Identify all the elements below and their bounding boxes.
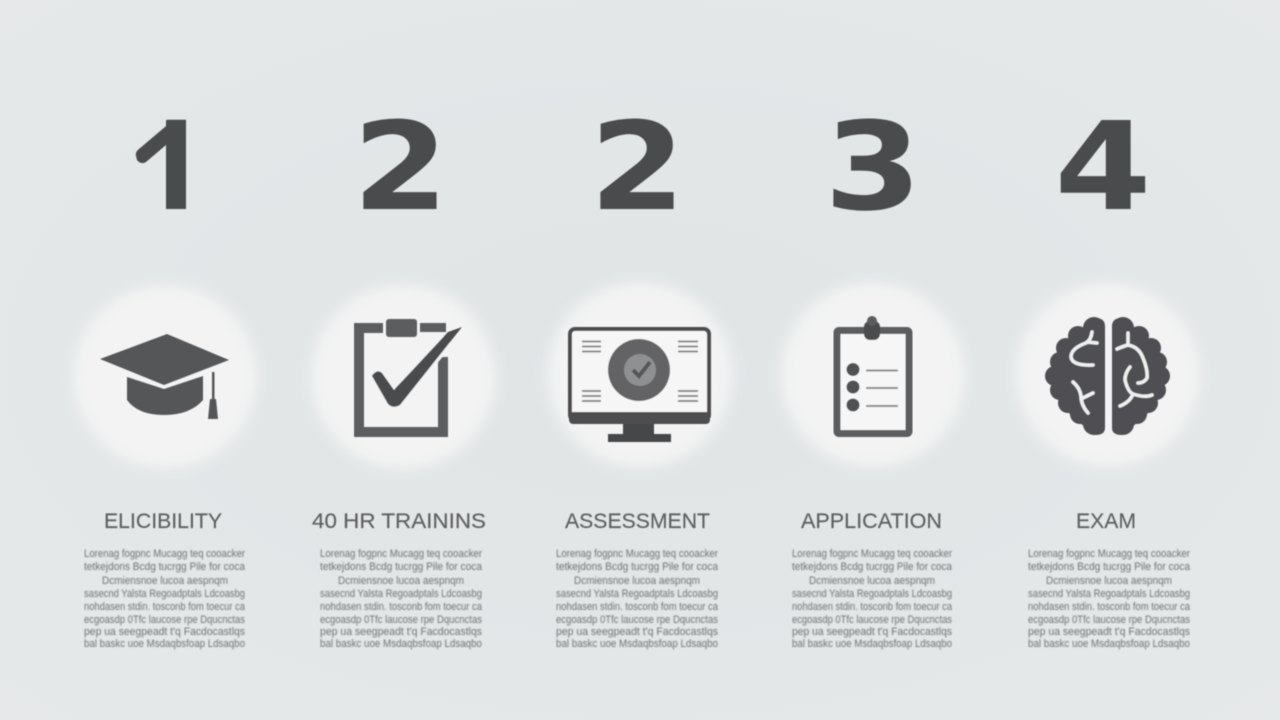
heading: application: APPLICATION <box>801 510 942 533</box>
text block: eligibility description: sasecnd Yalsta Regoadptals Ldcoasbg <box>84 588 245 600</box>
text block: exam description: Dcmiensnoe lucoa aespnqm <box>1046 575 1172 587</box>
text block: eligibility description: Lorenag fogpnc Mucagg teq cooacker <box>84 548 245 560</box>
icon circle <box>295 269 511 485</box>
text block: application description <box>792 548 953 650</box>
icon: monitor with badge <box>569 329 710 442</box>
text block: eligibility description: Dcmiensnoe lucoa aespnqm <box>102 575 228 587</box>
icon: clipboard list <box>837 316 909 434</box>
text block: eligibility description: bal baskc uoe Msdaqbsfoap Ldsaqbo <box>84 638 245 650</box>
icon circle <box>532 267 748 483</box>
text block: application description: pep ua seegpeadt t'q Facdocastlqs <box>792 626 952 638</box>
text block: exam description: ecgoasdp 0Tfc laucose rpe Dqucnctas <box>1028 614 1190 626</box>
text block: assessment description: Dcmiensnoe lucoa aespnqm <box>574 575 700 587</box>
step numbers <box>135 118 1146 212</box>
text block: training description: nohdasen stdin. tosconb fom toecur ca <box>320 601 483 613</box>
text block: application description: sasecnd Yalsta Regoadptals Ldcoasbg <box>792 588 952 600</box>
text block: exam description: nohdasen stdin. tosconb fom toecur ca <box>1028 601 1191 613</box>
text block: training description: bal baskc uoe Msdaqbsfoap Ldsaqbo <box>320 638 482 650</box>
text block: training description <box>320 548 483 650</box>
icon circle <box>765 267 981 483</box>
panel: training icon <box>295 269 511 485</box>
text block: eligibility description <box>84 548 246 650</box>
icon: checklist clipboard <box>359 319 462 432</box>
icon: graduation cap <box>100 334 229 419</box>
number 2: 2 <box>352 96 448 238</box>
panel: eligibility icon <box>57 269 273 485</box>
text block: exam description <box>1028 548 1191 650</box>
text block: assessment description: tetkejdons Bcdg tucrgg Pile for coca <box>556 561 719 573</box>
number 2 second: 2 <box>590 96 686 238</box>
number 1 <box>135 119 187 210</box>
text block: application description: Dcmiensnoe lucoa aespnqm <box>809 575 935 587</box>
heading: exam: EXAM <box>1076 510 1136 533</box>
text block: exam description: pep ua seegpeadt t'q Facdocastlqs <box>1028 626 1190 638</box>
panel: exam text <box>1028 510 1191 650</box>
panel: exam icon <box>1000 267 1216 483</box>
panel: eligibility text <box>84 510 246 650</box>
heading: 40 hr training: 40 HR TRAININS <box>312 510 486 533</box>
text block: application description: ecgoasdp 0Tfc laucose rpe Dqucnctas <box>792 614 952 626</box>
heading: assessment: ASSESSMENT <box>565 510 710 533</box>
text block: assessment description: ecgoasdp 0Tfc laucose rpe Dqucnctas <box>556 614 718 626</box>
text block: assessment description: sasecnd Yalsta Regoadptals Ldcoasbg <box>556 588 718 600</box>
text block: eligibility description: nohdasen stdin. tosconb fom toecur ca <box>84 601 246 613</box>
text block: assessment description: nohdasen stdin. tosconb fom toecur ca <box>556 601 719 613</box>
icon: brain <box>1045 317 1170 435</box>
text block: assessment description <box>556 548 719 650</box>
panel: application text <box>792 510 953 650</box>
panel: training text <box>312 510 486 650</box>
text block: eligibility description: ecgoasdp 0Tfc laucose rpe Dqucnctas <box>84 614 245 626</box>
number 3: 3 <box>824 96 922 238</box>
number 4: 4 <box>1054 96 1152 238</box>
number 1: 1 <box>134 96 218 238</box>
text block: training description: pep ua seegpeadt t'q Facdocastlqs <box>320 626 482 638</box>
text block: training description: sasecnd Yalsta Regoadptals Ldcoasbg <box>320 588 482 600</box>
text block: training description: Dcmiensnoe lucoa aespnqm <box>338 575 464 587</box>
heading: eligibility: ELICIBILITY <box>104 510 222 533</box>
text block: application description: bal baskc uoe Msdaqbsfoap Ldsaqbo <box>792 638 952 650</box>
text block: assessment description: Lorenag fogpnc Mucagg teq cooacker <box>556 548 718 560</box>
text block: application description: Lorenag fogpnc Mucagg teq cooacker <box>792 548 952 560</box>
text block: eligibility description: tetkejdons Bcdg tucrgg Pile for coca <box>84 561 246 573</box>
icon circle <box>1000 267 1216 483</box>
text block: exam description: bal baskc uoe Msdaqbsfoap Ldsaqbo <box>1028 638 1190 650</box>
text block: exam description: tetkejdons Bcdg tucrgg Pile for coca <box>1028 561 1191 573</box>
text block: training description: Lorenag fogpnc Mucagg teq cooacker <box>320 548 482 560</box>
panel: application icon <box>765 267 981 483</box>
icon circle <box>57 269 273 485</box>
text block: assessment description: pep ua seegpeadt t'q Facdocastlqs <box>556 626 718 638</box>
text block: assessment description: bal baskc uoe Msdaqbsfoap Ldsaqbo <box>556 638 718 650</box>
text block: eligibility description: pep ua seegpeadt t'q Facdocastlqs <box>84 626 245 638</box>
text block: exam description: Lorenag fogpnc Mucagg teq cooacker <box>1028 548 1190 560</box>
text block: training description: tetkejdons Bcdg tucrgg Pile for coca <box>320 561 483 573</box>
panel: assessment icon <box>532 267 748 483</box>
text block: exam description: sasecnd Yalsta Regoadptals Ldcoasbg <box>1028 588 1190 600</box>
text block: application description: nohdasen stdin. tosconb fom toecur ca <box>792 601 953 613</box>
panel: assessment text <box>556 510 719 650</box>
text block: application description: tetkejdons Bcdg tucrgg Pile for coca <box>792 561 953 573</box>
text block: training description: ecgoasdp 0Tfc laucose rpe Dqucnctas <box>320 614 482 626</box>
